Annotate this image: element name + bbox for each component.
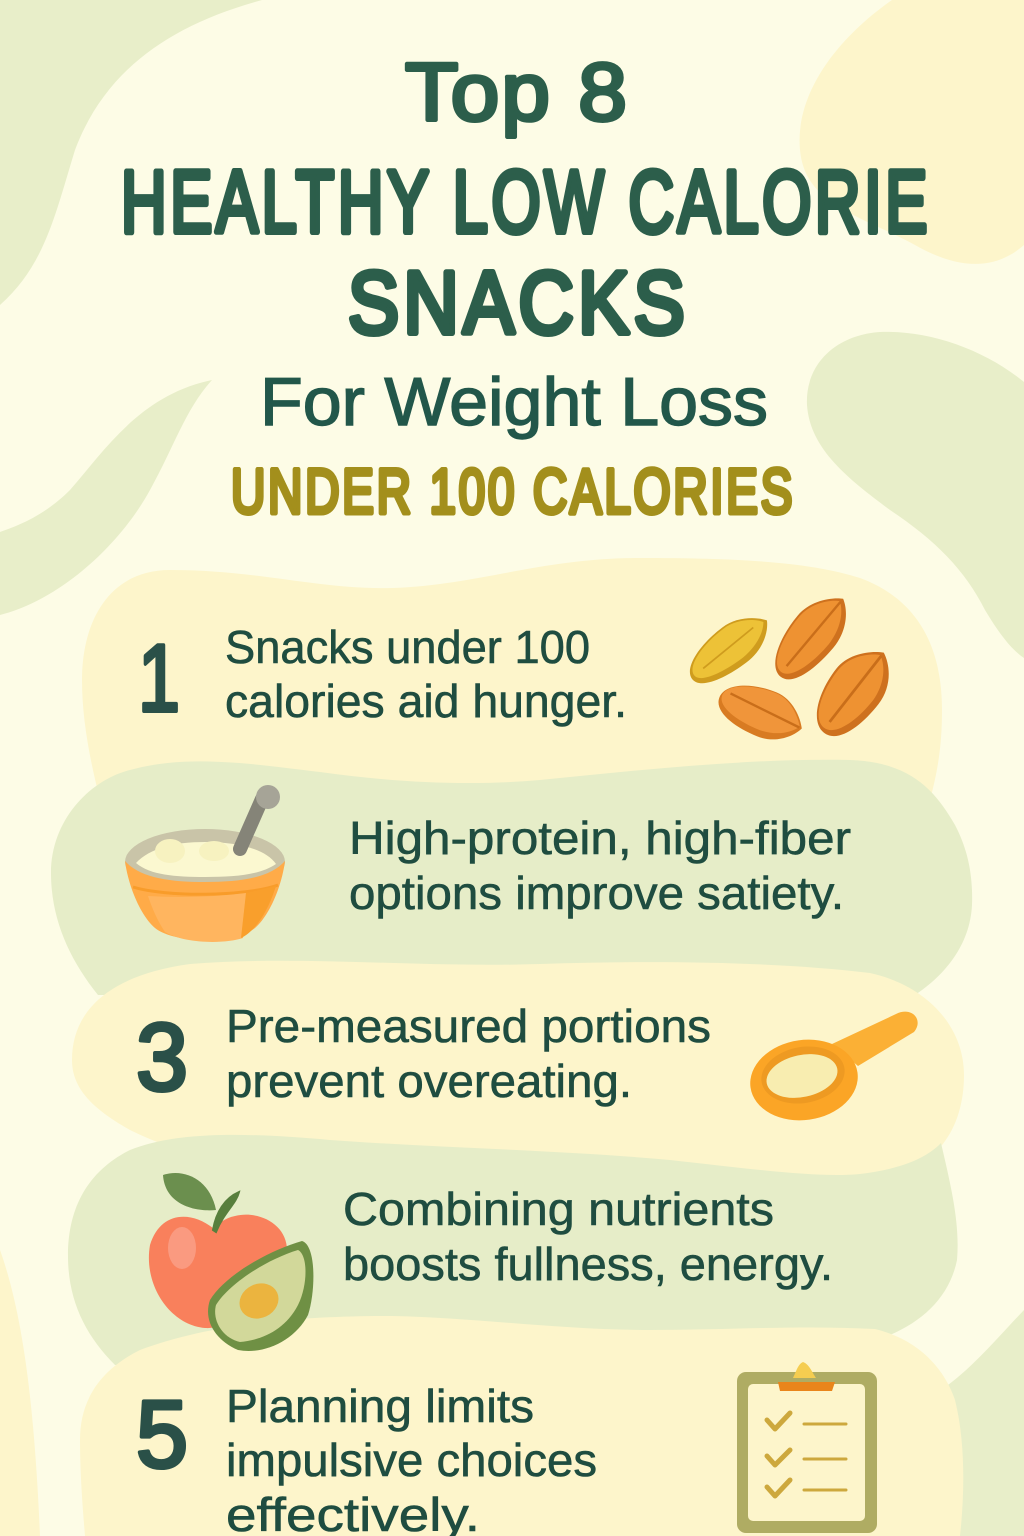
text block 3 — [226, 1000, 711, 1107]
text block 4 — [343, 1183, 833, 1290]
text block 4: boosts fullness, energy. — [343, 1238, 833, 1290]
subheading: for weight loss: For Weight Loss — [260, 364, 768, 440]
text block 3: prevent overeating. — [226, 1055, 632, 1107]
icon: clipboard checklist — [737, 1362, 877, 1533]
text block 5 — [226, 1380, 597, 1536]
title — [121, 47, 931, 527]
band 3 — [72, 961, 964, 1181]
text block 4: Combining nutrients — [343, 1183, 774, 1235]
text block 5: Planning limits — [226, 1380, 534, 1432]
panel 3: portions — [72, 961, 964, 1181]
subheading: under 100 calories: UNDER 100 CALORIES — [231, 457, 795, 527]
text block 5: impulsive choices — [226, 1434, 597, 1486]
heading: snacks: SNACKS — [348, 253, 689, 352]
panel 1: hunger — [82, 558, 942, 800]
number 3: 3 — [136, 1004, 188, 1111]
panel 5: planning — [80, 1316, 963, 1536]
band 2 — [51, 760, 972, 995]
icon: measuring spoon — [745, 1012, 918, 1127]
band 4 — [68, 1135, 958, 1365]
text block 3: Pre-measured portions — [226, 1000, 711, 1052]
text block 2: High-protein, high-fiber — [349, 812, 851, 864]
panel 2: protein and fiber — [51, 760, 972, 995]
panel 4: nutrients — [68, 1135, 958, 1365]
band 5 — [80, 1316, 963, 1536]
text block 1 — [225, 621, 627, 727]
text block 2: options improve satiety. — [349, 867, 844, 919]
icon: apple and avocado — [149, 1173, 313, 1351]
icon: almonds — [678, 583, 905, 751]
number 5: 5 — [136, 1381, 188, 1488]
icon: yogurt bowl — [125, 785, 285, 942]
number 1: 1 — [138, 625, 180, 732]
text block 1: calories aid hunger. — [225, 675, 627, 727]
band 1 — [82, 558, 942, 800]
heading: top 8: Top 8 — [405, 47, 629, 138]
text block 1: Snacks under 100 — [225, 621, 590, 673]
text block 2 — [349, 812, 851, 919]
